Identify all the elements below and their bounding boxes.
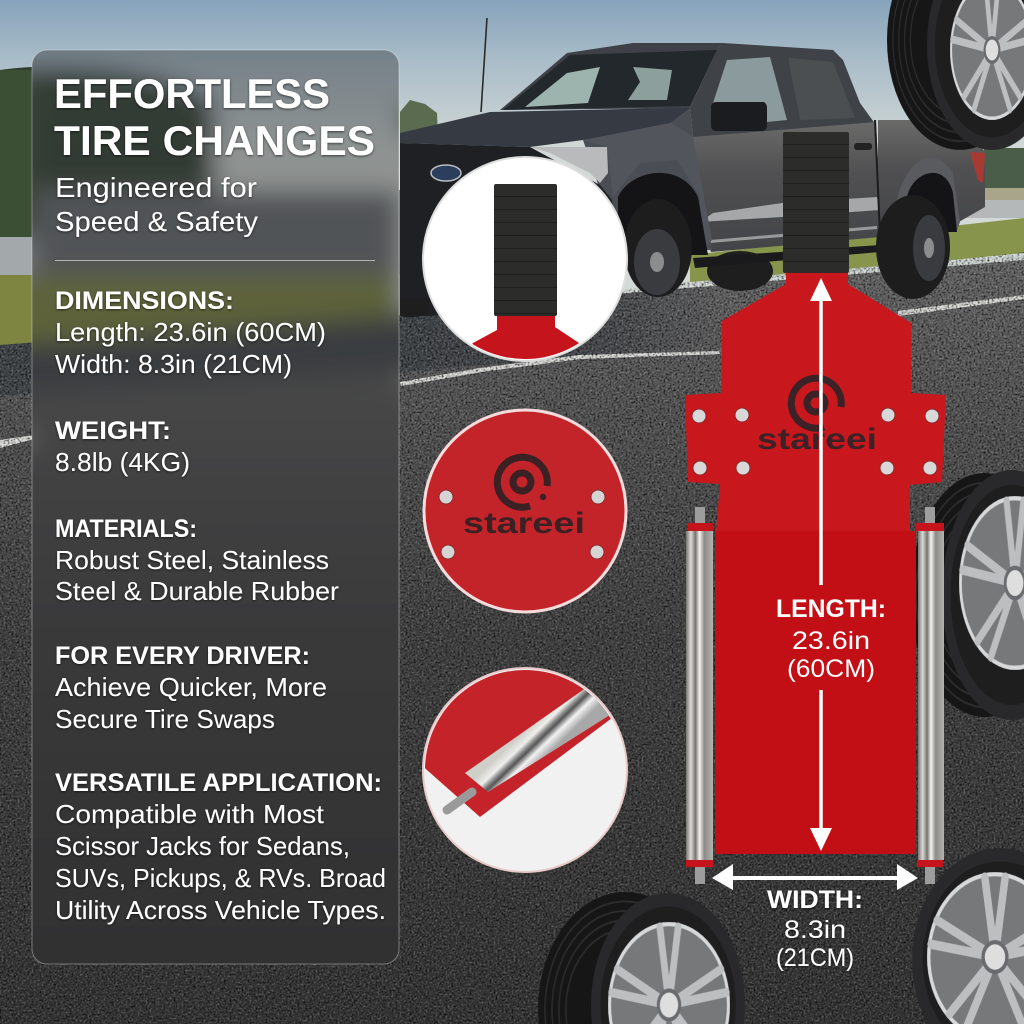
- grille and bumper: [400, 143, 622, 316]
- panel text: [54, 70, 386, 925]
- hood: [400, 108, 690, 147]
- tire: bottom right: [912, 848, 1024, 1024]
- subtitle: Engineered for: [55, 172, 257, 203]
- materials: Robust Steel, Stainless: [55, 545, 329, 575]
- logo word: stareei: [463, 507, 585, 540]
- lower board section: [715, 531, 916, 854]
- panel divider: [55, 260, 375, 261]
- rubber strap: [783, 132, 849, 273]
- strap icon: [494, 184, 557, 316]
- board logo rings: [791, 378, 841, 428]
- roller tube: [465, 685, 613, 792]
- board logo word: stareei: [757, 423, 877, 456]
- stair-shaped red board: [685, 132, 946, 854]
- tire: right middle: [910, 470, 1024, 720]
- glass information panel: [32, 50, 400, 964]
- length arrow: [810, 278, 832, 851]
- versatile application: Utility Across Vehicle Types.: [55, 895, 386, 925]
- title: [54, 70, 375, 164]
- far front wheel: [707, 251, 773, 291]
- length label: (60CM): [787, 655, 875, 683]
- weight: 8.8lb (4KG): [55, 447, 190, 477]
- front door window: [713, 57, 787, 122]
- materials: [55, 515, 339, 606]
- truck antenna: [481, 18, 487, 112]
- title: EFFORTLESS: [54, 70, 330, 117]
- board screws: [692, 408, 939, 475]
- door panels: [693, 122, 880, 252]
- bed seam: [875, 120, 880, 235]
- length label: [776, 595, 886, 683]
- width label: [767, 886, 863, 972]
- tire: top right: [887, 0, 1024, 150]
- front left tire: [400, 298, 432, 317]
- dimensions: [55, 287, 326, 379]
- headlight: [530, 147, 608, 183]
- door stripe: [700, 197, 880, 222]
- rear wheel arch: [897, 158, 960, 230]
- ford badge: [431, 165, 461, 181]
- logo dot: [540, 494, 546, 500]
- lower chrome strip: [710, 226, 877, 243]
- truck bed: [873, 120, 985, 240]
- cab frame: [690, 43, 876, 137]
- panel tint: [32, 50, 399, 964]
- versatile application: [55, 769, 386, 925]
- wheel arch front: [618, 173, 708, 255]
- detail circle: rubber strap: [423, 157, 627, 370]
- front body underlay: [583, 108, 712, 250]
- materials: MATERIALS:: [55, 515, 197, 543]
- tire: bottom centre: [538, 892, 745, 1024]
- side mirror: [711, 102, 767, 131]
- title: TIRE CHANGES: [54, 117, 375, 164]
- red plate: [425, 670, 611, 817]
- versatile application: SUVs, Pickups, & RVs. Broad: [55, 863, 386, 893]
- width arrow: [712, 864, 918, 890]
- logo rings: [497, 457, 547, 507]
- weight: WEIGHT:: [55, 417, 171, 445]
- left roller: [686, 507, 713, 884]
- width label: 8.3in: [784, 916, 846, 944]
- length label: LENGTH:: [776, 595, 886, 623]
- dimensions: Length: 23.6in (60CM): [55, 317, 326, 347]
- dimensions: Width: 8.3in (21CM): [55, 349, 292, 379]
- sunshade left: [525, 67, 600, 107]
- width label: (21CM): [776, 944, 854, 972]
- panel blurred backdrop: [32, 54, 399, 964]
- sunshade right: [628, 67, 672, 100]
- rear wheel: [876, 195, 950, 299]
- detail circle: logo plate: [424, 410, 626, 612]
- versatile application: VERSATILE APPLICATION:: [55, 769, 382, 797]
- subtitle: Speed & Safety: [55, 206, 258, 237]
- for every driver: FOR EVERY DRIVER:: [55, 642, 310, 670]
- fender: [583, 120, 712, 253]
- asphalt grain: [0, 252, 1024, 1024]
- axle bolt: [447, 792, 472, 810]
- roof: [500, 43, 723, 110]
- front wheel: [624, 199, 692, 297]
- for every driver: Achieve Quicker, More: [55, 672, 327, 702]
- door handle: [854, 143, 872, 150]
- length label: 23.6in: [792, 627, 870, 655]
- width label: WIDTH:: [767, 886, 863, 914]
- weight: [55, 417, 190, 477]
- screws: [439, 490, 605, 559]
- subtitle: [55, 172, 258, 237]
- for every driver: Secure Tire Swaps: [55, 704, 275, 734]
- running board: [693, 245, 880, 268]
- materials: Steel & Durable Rubber: [55, 576, 339, 606]
- right roller: [916, 507, 944, 884]
- detail circle: roller: [422, 667, 628, 873]
- for every driver: [55, 642, 327, 734]
- rear door window: [788, 58, 855, 120]
- versatile application: Compatible with Most: [55, 799, 325, 829]
- pickup truck: [400, 18, 985, 317]
- tail light: [970, 152, 985, 183]
- windshield: [503, 50, 717, 110]
- dimensions: DIMENSIONS:: [55, 287, 234, 315]
- versatile application: Scissor Jacks for Sedans,: [55, 831, 350, 861]
